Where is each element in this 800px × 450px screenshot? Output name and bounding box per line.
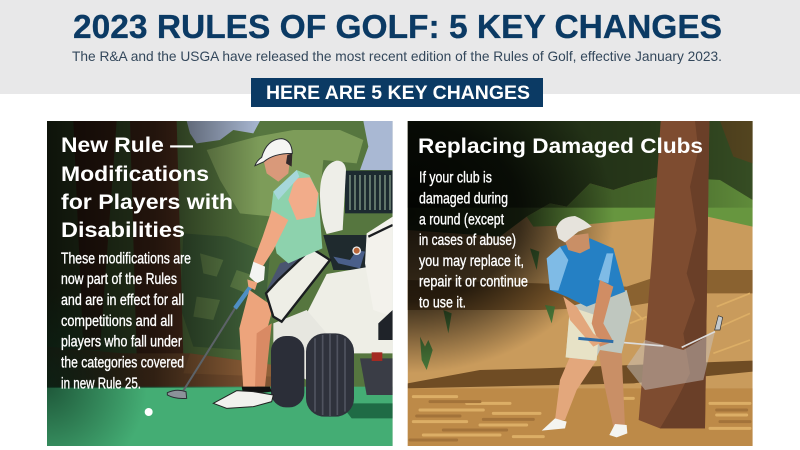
body text: to use it. [419, 295, 466, 312]
body text: now part of the Rules [61, 271, 177, 288]
legs [239, 290, 273, 388]
body text: a round (except [419, 211, 505, 228]
panel: replacing damaged clubs [408, 121, 753, 446]
heading: Modifications [61, 163, 209, 186]
subtitle: The R&A and the USGA have released the most recent edition of the Rules of Golf, effective January 2023. [72, 48, 722, 64]
heading: Replacing Damaged Clubs [418, 135, 703, 158]
body text: players who fall under [61, 334, 182, 351]
ball [145, 408, 153, 416]
shorts [566, 290, 632, 361]
title: 2023 RULES OF GOLF: 5 KEY CHANGES [73, 8, 722, 45]
body text [419, 170, 528, 312]
legs [555, 357, 597, 420]
swing blur [627, 332, 715, 390]
body text: If your club is [419, 170, 492, 187]
body text: These modifications are [61, 250, 191, 267]
illustration: golfer swinging at tree [408, 121, 753, 446]
panel: modifications for players with disabilities [47, 121, 393, 446]
head and cap [263, 153, 291, 182]
illustration: golfer beside cart [47, 121, 393, 446]
body text: and are in effect for all [61, 292, 184, 309]
shirt [547, 238, 625, 307]
arms [592, 280, 613, 347]
body text: competitions and all [61, 313, 173, 330]
body text: in new Rule 25. [61, 375, 141, 392]
body text: the categories covered [61, 355, 184, 372]
torso [270, 170, 322, 263]
wheels [271, 336, 304, 407]
tree [639, 121, 709, 428]
glove and hand [249, 262, 265, 283]
basket and cart [345, 171, 393, 213]
head and cap [563, 233, 590, 253]
banner: HERE ARE 5 KEY CHANGES [266, 83, 530, 104]
shoes [542, 418, 567, 431]
heading [61, 134, 233, 242]
banner [251, 78, 543, 107]
shorts and bag strap [266, 258, 299, 290]
heading: Disabilities [61, 219, 185, 242]
heading: New Rule — [61, 134, 193, 157]
body text: repair it or continue [419, 274, 528, 291]
body text: in cases of abuse) [419, 232, 516, 249]
body text: damaged during [419, 190, 508, 207]
club [183, 308, 235, 391]
body text: you may replace it, [419, 253, 524, 270]
body text [61, 250, 191, 392]
heading: for Players with [61, 191, 233, 214]
header band [0, 0, 800, 94]
